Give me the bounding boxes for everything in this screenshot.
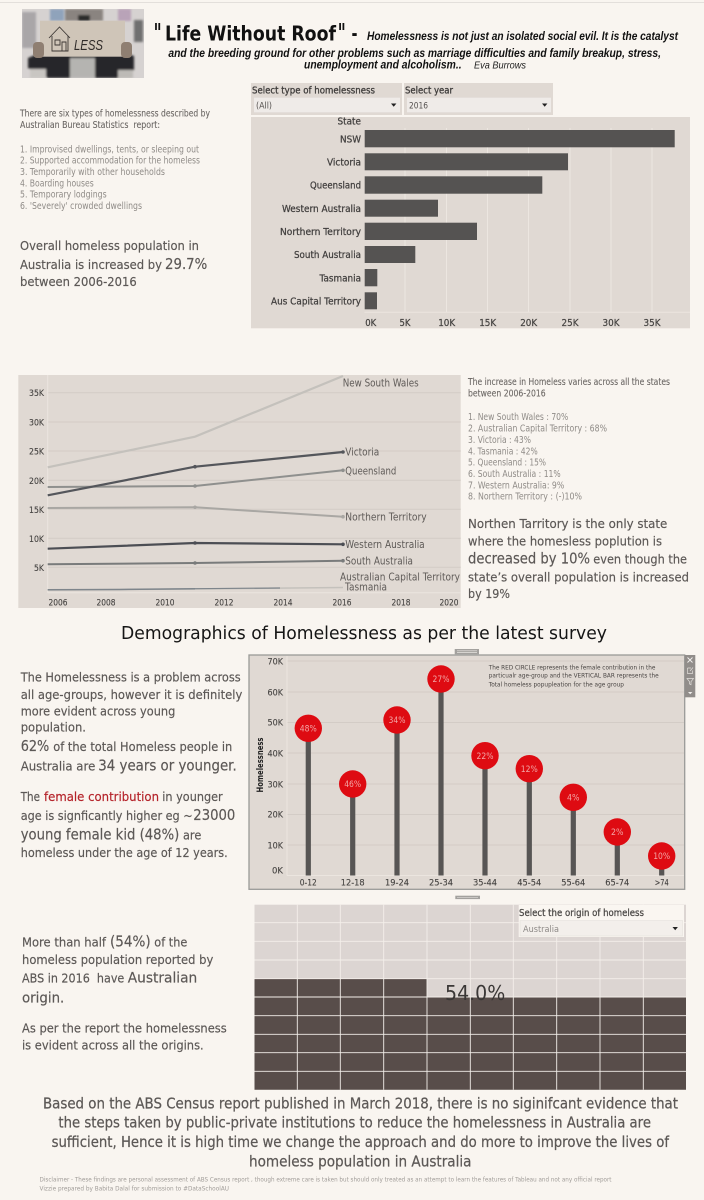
photo: person holding a homeLESS cardboard sign (22, 9, 144, 78)
bar: Tasmania: Tasmania (319, 274, 361, 284)
title and quote: " (338, 19, 346, 49)
text block: age groups: 62% (21, 737, 49, 755)
title and quote: and the breeding ground for other problems such as marriage difficulties and family breakup, stress, (168, 48, 661, 60)
filter: select type of homelessness (251, 83, 402, 115)
line: South Australia: South Australia (345, 556, 413, 568)
filter: select type of homelessness: Select type of homelessness (252, 85, 375, 96)
line: Victoria: Victoria (345, 447, 379, 459)
bar: Queensland (310, 176, 542, 194)
disclaimer (40, 1176, 612, 1192)
title and quote: " (154, 19, 162, 49)
bar chart x axis: 35K (644, 318, 661, 329)
text block: increase by state (467, 377, 670, 503)
text block: age groups: The Homelessness is a problem across (20, 670, 241, 685)
lollipop: 35-44: 35-44 (473, 879, 497, 889)
callout: overall increase 29.7%: between 2006-2016 (20, 274, 137, 289)
title and quote: Eva Burrows (474, 60, 527, 72)
y axis title: Homelessness (256, 738, 266, 792)
text block: female contribution: in younger (162, 789, 223, 804)
chart toolbar icons (685, 655, 695, 697)
line: New South Wales (48, 376, 419, 467)
callout: Northern Territory decrease: where the homesless poplution is (468, 533, 662, 548)
text block: 54% Australian origin: homeless population reported by (22, 952, 214, 967)
lollipop: 35-44 (471, 742, 499, 889)
line chart x axis: 2008 (96, 599, 116, 609)
text block: increase by state: 4. Tasmania : 42% (468, 446, 538, 457)
lollipop: 45-54 (516, 755, 543, 889)
text block: 54% Australian origin: origin. (22, 990, 64, 1006)
line: Western Australia: Western Australia (345, 539, 425, 551)
callout: Northern Territory decrease: Northen Tarritory is the only state (468, 516, 668, 531)
callout: Northern Territory decrease: state’s overall population is increased (468, 569, 689, 584)
callout: overall increase 29.7%: Overall homeless population in (20, 238, 199, 253)
filter: select the origin of homeless: Australia (523, 925, 559, 935)
bar: Victoria: Victoria (327, 158, 361, 168)
line chart x axis: 2016 (332, 599, 352, 609)
chart note: particualr age-group and the VERTICAL BAR represents the (489, 672, 659, 680)
callout: Northern Territory decrease (468, 516, 689, 601)
text block: six types of homelessness (19, 109, 210, 212)
callout: overall increase 29.7%: 29.7% (165, 255, 207, 273)
bar: Northern Territory: Northern Territory (280, 227, 361, 238)
text block: six types of homelessness: Australian Bureau Statistics report: (20, 120, 160, 131)
waffle value label: 54.0% (445, 981, 505, 1005)
title and quote: Life Without Roof (165, 22, 337, 46)
lollipop: 0-12: 0-12 (300, 879, 317, 889)
line chart x axis: 2018 (392, 599, 411, 609)
text block: six types of homelessness: 1. Improvised dwellings, tents, or sleeping out (20, 144, 199, 155)
chart note: The RED CIRCLE represents the female contribution in the (488, 664, 655, 672)
chart y axis: 60K (268, 688, 284, 698)
callout: Northern Territory decrease: even though the (593, 552, 687, 567)
title and quote: - (352, 22, 358, 46)
heading: demographics: Demographics of Homelessness as per the latest survey (121, 623, 607, 644)
callout: overall increase 29.7%: Australia is increased by (20, 257, 163, 272)
lollipop: 19-24: 19-24 (385, 879, 409, 889)
line: Queensland: Queensland (345, 466, 396, 478)
lollipop: 25-34: 25-34 (429, 879, 453, 889)
chart y axis (268, 658, 284, 876)
text block: female contribution: female contribution (44, 789, 159, 804)
chart y axis: 70K (268, 658, 284, 668)
text block: six types of homelessness: There are six types of homelessness described by (19, 109, 210, 120)
text block: increase by state: 7. Western Australia: 9% (468, 480, 564, 491)
text block: six types of homelessness: 6. 'Severely' crowded dwellings (20, 201, 142, 212)
line chart y axis: 20K (29, 477, 45, 487)
bar: Western Australia (282, 200, 438, 217)
lollipop: over 74 (648, 842, 675, 889)
text block: 54% Australian origin: (54%) (110, 933, 151, 951)
text block: female contribution: homeless under the age of 12 years. (21, 845, 228, 860)
dashboard handle: bottom (455, 896, 480, 899)
text block: six types of homelessness: 2. Supported accommodation for the homeless (20, 156, 200, 167)
line chart y axis: 35K (29, 389, 45, 399)
bar: Tasmania (319, 269, 377, 286)
line: Victoria (48, 447, 379, 495)
chart note (488, 664, 659, 689)
text block: increase by state: 8. Northern Territory : (-)10% (468, 492, 582, 503)
line: Tasmania: Tasmania (344, 581, 387, 593)
chart y axis: 20K (268, 810, 284, 820)
conclusion text (43, 1094, 678, 1171)
bar: Aus Capital Territory (271, 292, 377, 309)
disclaimer: Disclaimer - These findings are personal assessment of ABS Census report , though extreme care is taken but should only treated as an attempt to learn the features of Tableau and not any official report (40, 1176, 612, 1184)
text block: age groups: population. (21, 720, 86, 735)
bar: NSW (340, 130, 675, 147)
line: Northern Territory (48, 506, 427, 524)
bar chart: homeless population by state: State (338, 117, 361, 128)
lollipop: 55-64: 55-64 (561, 879, 586, 889)
bar: Victoria (327, 153, 568, 170)
lollipop: 45-54: 45-54 (517, 879, 542, 889)
lollipop: 35-44: 22% (476, 752, 494, 762)
filter: select year: 2016 (409, 102, 428, 112)
text block: 54% Australian origin: of the (154, 935, 188, 950)
lollipop: 19-24 (383, 706, 411, 889)
text block: age groups (20, 670, 243, 775)
bar chart x axis: 5K (400, 318, 411, 329)
text block: female contribution: young female kid (48%) (21, 825, 179, 843)
callout: Northern Territory decrease: decreased by 10% (468, 550, 590, 568)
chart note: Total homeless popupleation for the age group (488, 681, 624, 689)
bar chart: homeless population by state (251, 117, 690, 329)
text block: six types of homelessness: 4. Boarding houses (20, 178, 94, 189)
text block: female contribution: are (183, 827, 202, 842)
line: South Australia (48, 556, 413, 568)
line chart y axis: 25K (29, 448, 45, 458)
line chart x axis (48, 599, 459, 609)
text block: 54% Australian origin: is evident across all the origins. (22, 1037, 204, 1052)
line chart y axis (29, 389, 45, 574)
line chart x axis: 2020 (440, 599, 459, 609)
bar chart x axis: 15K (479, 318, 497, 329)
lollipop: 65-74 (604, 818, 631, 889)
filter: select year: Select year (405, 85, 454, 96)
line: Northern Territory: Northern Territory (345, 512, 427, 524)
line chart: homelessness by state 2006-2016 (18, 375, 461, 609)
bar chart x axis: 0K (365, 318, 377, 329)
bar: Western Australia: Western Australia (282, 204, 361, 215)
line chart x axis: 2014 (274, 599, 293, 609)
photo: person holding a homeLESS cardboard sign: LESS (74, 37, 103, 54)
text block: increase by state: 6. South Australia : 11% (468, 469, 561, 480)
line chart x axis: 2012 (214, 599, 234, 609)
lollipop: 25-34: 27% (432, 675, 450, 685)
callout: overall increase 29.7% (20, 238, 207, 289)
filter: select type of homelessness: (All) (256, 102, 272, 112)
text block: age groups: 34 years or younger. (98, 757, 237, 775)
disclaimer: Vizzie prepared by Babita Dalal for submission to #DataSchoolAU (40, 1184, 229, 1192)
lollipop: 0-12 (295, 715, 322, 889)
lollipop: 55-64: 4% (567, 794, 580, 804)
lollipop: 0-12: 48% (300, 724, 317, 734)
bar chart x axis: 30K (602, 318, 620, 329)
lollipop: over 74: 10% (653, 852, 670, 862)
text block: increase by state: 3. Victoria : 43% (468, 435, 531, 446)
line: Australian Capital Territory: Australian Capital Territory (340, 571, 460, 583)
text block: age groups: Australia are (21, 759, 96, 774)
waffle chart: 54% Australian origin (254, 905, 686, 1090)
chart y axis: 10K (268, 842, 284, 852)
lollipop: 12-18 (339, 770, 366, 889)
text block: female contribution: 23000 (193, 806, 235, 824)
text block: age groups: all age-groups, however it is definitely (21, 687, 243, 702)
line chart x axis: 2006 (48, 599, 68, 609)
text block: female contribution: The (20, 789, 40, 804)
bar: South Australia: South Australia (294, 250, 361, 261)
lollipop: 25-34 (427, 665, 455, 889)
bar: Aus Capital Territory: Aus Capital Territory (271, 296, 361, 308)
lollipop: 19-24: 34% (388, 716, 406, 726)
text block: increase by state: 2. Australian Capital Territory : 68% (468, 424, 607, 435)
filter: select the origin of homeless (519, 905, 684, 937)
line chart y axis: 15K (29, 506, 45, 516)
text block: increase by state: 1. New South Wales : 70% (468, 412, 568, 423)
callout: Northern Territory decrease: by 19% (468, 586, 510, 601)
bar: NSW: NSW (340, 134, 361, 146)
bar: Northern Territory (280, 223, 477, 240)
bar: Queensland: Queensland (310, 180, 361, 192)
line: New South Wales: New South Wales (343, 378, 419, 390)
chart y axis: 50K (268, 718, 284, 728)
lollipop: 12-18: 12-18 (341, 879, 365, 889)
lollipop: over 74: >74 (655, 879, 669, 889)
text block: increase by state: 5. Queensland : 15% (468, 458, 546, 469)
line chart x axis: 2010 (156, 599, 175, 609)
text block: 54% Australian origin: ABS in 2016 have (22, 971, 125, 986)
line chart y axis: 30K (29, 418, 45, 428)
lollipop: 45-54: 12% (521, 765, 538, 775)
bar chart x axis: 20K (520, 318, 538, 329)
text block: age groups: of the total Homeless people in (53, 739, 232, 754)
text block: 54% Australian origin: As per the report the homelessness (22, 1021, 227, 1036)
text block: 54% Australian origin: More than half (22, 935, 107, 950)
filter: select the origin of homeless: Select the origin of homeless (519, 908, 644, 919)
lollipop chart: homelessness by age group (249, 655, 685, 889)
chart y axis: 30K (268, 780, 284, 790)
bar chart x axis: 10K (438, 318, 456, 329)
chart y axis: 40K (268, 750, 284, 760)
filter: select year (404, 83, 553, 115)
chart y axis: 0K (272, 866, 284, 876)
conclusion text: homeless population in Australia (249, 1153, 472, 1171)
line chart y axis: 5K (34, 564, 45, 574)
bar: South Australia (294, 246, 415, 263)
bar chart x axis: 25K (562, 318, 579, 329)
lollipop: 12-18: 46% (344, 780, 361, 790)
title and quote: unemployment and alcoholism.. (304, 60, 462, 72)
text block: increase by state: between 2006-2016 (468, 388, 546, 399)
bar chart x axis (365, 318, 661, 329)
title and quote (154, 19, 679, 72)
text block: female contribution: age is signficantly higher eg ~ (21, 808, 193, 823)
text block: age groups: more evident across young (21, 704, 175, 719)
text block: 54% Australian origin (22, 933, 227, 1052)
text block: female contribution (20, 789, 235, 860)
line chart y axis: 10K (29, 535, 45, 545)
text block: six types of homelessness: 5. Temporary lodgings (20, 190, 107, 201)
lollipop: 65-74: 2% (611, 828, 624, 838)
text block: six types of homelessness: 3. Temporarily with other households (20, 167, 165, 178)
lollipop: 65-74: 65-74 (605, 879, 630, 889)
text block: 54% Australian origin: Australian (128, 971, 197, 987)
dashboard handle: top (455, 649, 479, 654)
lollipop: 55-64 (560, 784, 587, 889)
line: Queensland (48, 466, 396, 488)
line: Western Australia (48, 539, 425, 551)
